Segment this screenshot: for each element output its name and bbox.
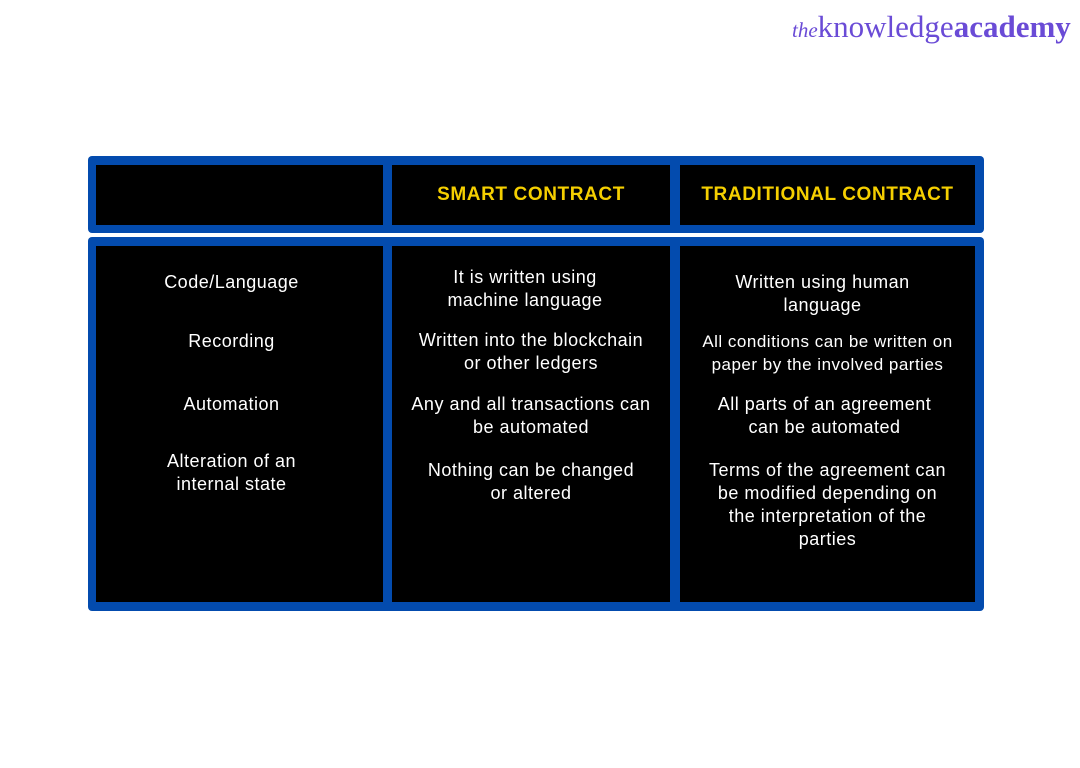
column: traditional contract: the interpretation of the	[729, 506, 926, 526]
header: traditional contract	[680, 165, 975, 225]
column: traditional contract: paper by the involved parties	[712, 355, 943, 374]
column: criteria: Code/Language	[164, 272, 299, 292]
column: smart contract: Written into the blockchain	[419, 330, 643, 350]
column: traditional contract: language	[783, 295, 862, 315]
column: traditional contract: All parts of an agreement	[718, 394, 931, 414]
column: traditional contract: be modified depending on	[718, 483, 937, 503]
column: smart contract: or other ledgers	[464, 353, 598, 373]
header row	[88, 156, 984, 233]
column: criteria: Recording	[188, 331, 275, 351]
column: smart contract	[392, 246, 670, 602]
column: smart contract: or altered	[490, 483, 572, 503]
column: traditional contract: Terms of the agreement can	[709, 460, 946, 480]
header: smart contract	[392, 165, 670, 225]
body rows	[88, 237, 984, 611]
header empty cell	[96, 165, 383, 225]
column: smart contract: Any and all transactions can	[411, 394, 651, 414]
column: smart contract: Nothing can be changed	[428, 460, 634, 480]
column: smart contract: It is written using	[453, 267, 597, 287]
column: criteria: internal state	[176, 474, 287, 494]
header: smart contract: SMART CONTRACT	[437, 184, 625, 205]
column: traditional contract: parties	[799, 529, 856, 549]
column: smart contract: machine language	[447, 290, 603, 310]
column: criteria: Alteration of an	[167, 451, 296, 471]
header: traditional contract: TRADITIONAL CONTRACT	[701, 184, 954, 205]
column: criteria	[96, 246, 383, 602]
column: traditional contract: Written using human	[735, 272, 910, 292]
column: traditional contract: can be automated	[748, 417, 901, 437]
column: smart contract: be automated	[473, 417, 589, 437]
column: traditional contract: All conditions can be written on	[702, 332, 953, 351]
logo: theknowledgeacademy	[792, 9, 1071, 44]
column: traditional contract	[680, 246, 975, 602]
column: criteria: Automation	[183, 394, 280, 414]
